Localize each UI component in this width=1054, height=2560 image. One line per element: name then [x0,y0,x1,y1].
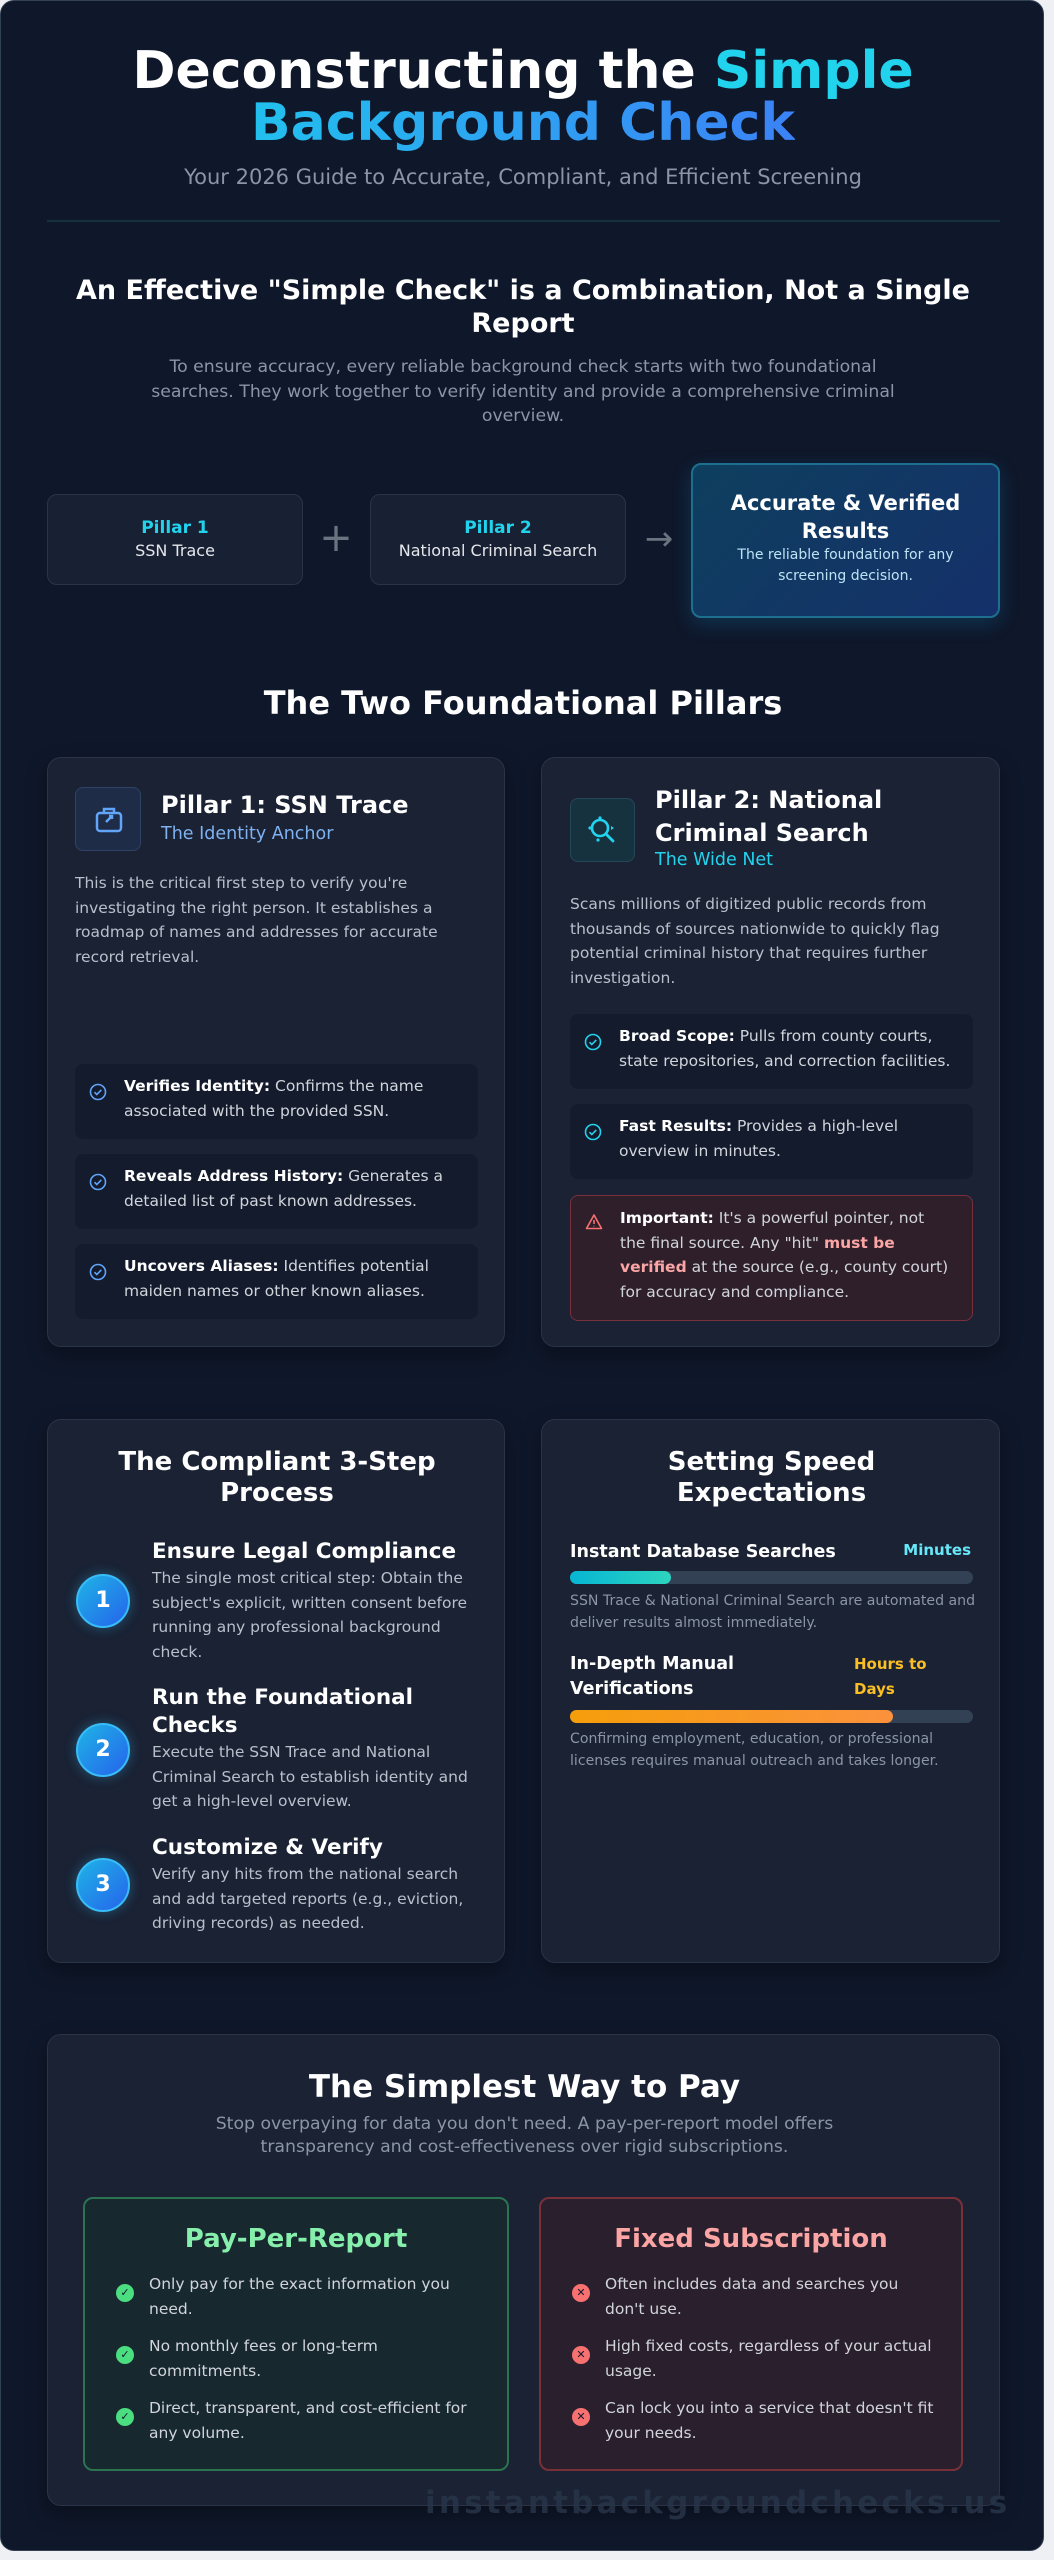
panel: compliant 3-step process: Execute the SSN Trace and National Criminal Search to establish identity and get a high-level overview. [152,1743,468,1810]
icon: plus: + [319,515,353,561]
panel: speed expectations [541,1419,1000,1963]
item: broad scope: Broad Scope: Pulls from county courts, state repositories, and correction facilities. [619,1027,950,1070]
subtitle: Stop overpaying for data you don't need. A pay-per-report model offers transparency and cost-effectiveness over rigid subscriptions. [216,2114,833,2157]
label: manual: In-Depth Manual Verifications [570,1654,734,1699]
box title: Pay-Per-Report [185,2224,407,2254]
box: pillar 1: Pillar 1 [141,518,209,538]
icon: folder [75,787,141,851]
item: fast results [570,1104,973,1179]
heading: two pillars: The Two Foundational Pillars [264,684,782,722]
box: pillar 2 [370,494,626,585]
panel: speed expectations: Minutes [903,1541,971,1559]
step 3: 3 [95,1872,111,1897]
caption: manual: Confirming employment, education, or professional licenses requires manual outreach and takes longer. [570,1731,939,1769]
heading [668,1447,875,1508]
callout: important [570,1195,973,1321]
panel: compliant 3-step process: The single most critical step: Obtain the subject's explicit, written consent before running any professional background check. [152,1569,467,1660]
step 3 [76,1858,130,1912]
item: address history [75,1154,478,1229]
cons list: High fixed costs, regardless of your actual usage. [605,2337,932,2380]
item: aliases [75,1244,478,1319]
box: pillar 2: Pillar 2 [464,518,532,538]
callout: important: verified at the source (e.g., county court) [620,1258,948,1276]
pros list: Only pay for the exact information you need. [149,2275,450,2318]
pros list: Direct, transparent, and cost-efficient for any volume. [149,2399,467,2442]
panel: compliant 3-step process [47,1419,505,1963]
panel: simplest way to pay [47,2034,1000,2506]
item: verifies identity: Verifies Identity: Confirms the name associated with the provided SSN. [124,1077,423,1120]
bar: instant [570,1571,973,1584]
title: Deconstructing the Simple [132,41,914,101]
box: pillar 2: National Criminal Search [399,541,597,560]
item: aliases: Uncovers Aliases: Identifies potential maiden names or other known aliases. [124,1257,429,1300]
pros list: No monthly fees or long-term commitments. [149,2337,378,2380]
panel: pillar 2 national criminal search [541,757,1000,1347]
panel: pillar 1 SSN trace [47,757,505,1347]
panel: compliant 3-step process: Run the Foundational Checks [152,1685,413,1738]
callout: important: the final source. Any "hit" must be [620,1234,895,1252]
heading: combination: An Effective "Simple Check" is a Combination, Not a Single Report [76,275,970,339]
title: Background Check [251,93,795,153]
step 1: 1 [95,1588,111,1613]
box: fixed subscription [539,2197,963,2471]
description: This is the critical first step to verify you're investigating the right person. It establishes a roadmap of names and addresses for accurate record retrieval. [75,874,438,966]
description: Scans millions of digitized public records from thousands of sources nationwide to quickly flag potential criminal history that requires further investigation. [570,895,940,986]
item: fast results: Fast Results: Provides a high-level overview in minutes. [619,1117,898,1160]
pros list: ✓ [120,2348,130,2361]
pros list [116,2275,467,2442]
title: Pillar 2: National Criminal Search [655,786,882,847]
callout: important: Important: It's a powerful pointer, not [620,1209,924,1227]
box: result: screening decision. [778,568,913,584]
box: pillar 1: SSN Trace [135,541,215,560]
cons list: ✕ [576,2348,586,2361]
pros list: ✓ [120,2410,130,2423]
cons list: Often includes data and searches you don't use. [605,2275,898,2318]
cons list: ✕ [576,2410,586,2423]
panel: compliant 3-step process: Customize & Verify [152,1835,383,1860]
panel: compliant 3-step process: Verify any hits from the national search and add targeted reports (e.g., eviction, driving records) as needed. [152,1865,463,1932]
cons list [572,2275,934,2442]
heading: The Compliant 3-Step [118,1447,436,1477]
intro paragraph: To ensure accuracy, every reliable background check starts with two foundational searches. They work together to verify identity and provide a comprehensive criminal overview. [151,357,895,426]
subtitle: Your 2026 Guide to Accurate, Compliant, and Efficient Screening [184,165,862,189]
subtitle: The Identity Anchor [161,824,333,844]
step 2 [76,1723,130,1777]
heading: Expectations [677,1478,866,1508]
subtitle: The Wide Net [655,850,773,870]
heading: Process [220,1478,334,1508]
title [132,41,914,153]
step 1 [76,1574,130,1628]
heading: The Simplest Way to Pay [309,2069,740,2105]
cons list: ✕ [576,2286,586,2299]
panel: compliant 3-step process: Ensure Legal Compliance [152,1539,456,1564]
heading [118,1447,436,1508]
panel: speed expectations: Hours to Days [854,1655,927,1698]
step 2: 2 [95,1737,111,1762]
box: result: Results [802,519,889,543]
box: pillar 1 [47,494,303,585]
arrow: → [645,519,673,559]
label: instant: Instant Database Searches [570,1542,836,1562]
pros list: ✓ [120,2286,130,2299]
box: result: The reliable foundation for any [737,547,954,563]
box: result [691,463,1000,618]
box title: Fixed Subscription [614,2224,888,2254]
bar: manual [570,1710,973,1723]
box: pay-per-report [83,2197,509,2471]
cons list: Can lock you into a service that doesn't fit your needs. [605,2399,933,2442]
heading: Setting Speed [668,1447,875,1477]
item: verifies identity [75,1064,478,1139]
box: result: Accurate & Verified [731,491,960,515]
watermark: instantbackgroundchecks.us [425,2485,1010,2521]
callout: important: for accuracy and compliance. [620,1282,849,1300]
title: Pillar 1: SSN Trace [161,791,409,819]
icon: search [570,798,635,862]
item: address history: Reveals Address History: Generates a detailed list of past known addresses. [124,1167,443,1210]
item: broad scope [570,1014,973,1089]
caption: instant: SSN Trace & National Criminal Search are automated and deliver results almost immediately. [570,1593,975,1631]
